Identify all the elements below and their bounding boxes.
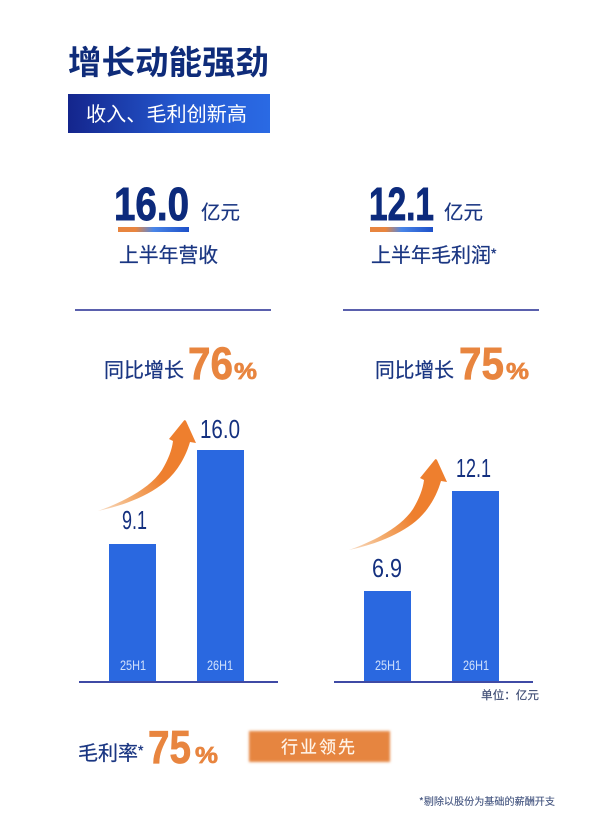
arrow: gross profit growth <box>349 459 447 550</box>
value 9.1: 9.1 <box>122 507 147 535</box>
gross margin asterisk: * <box>138 742 144 758</box>
bar 25H1 revenue: 25H1 <box>120 658 146 673</box>
value 16.0: 16.0 <box>200 416 240 444</box>
panel: revenue <box>75 178 271 389</box>
unit note: 单位：亿元 <box>481 687 540 703</box>
badge: industry leading: 行业领先 <box>281 733 355 758</box>
gross profit growth percent: % <box>506 358 529 384</box>
panel: gross profit <box>343 178 539 389</box>
gross margin percent: % <box>195 742 218 768</box>
bar chart: gross profit <box>334 455 533 683</box>
gross profit figure: 12.1 <box>369 178 434 230</box>
gross profit unit: 亿元 <box>444 196 483 225</box>
revenue growth label: 同比增长 <box>104 354 184 383</box>
value 12.1: 12.1 <box>456 455 491 483</box>
revenue unit: 亿元 <box>201 196 240 225</box>
badge: industry leading <box>249 731 390 762</box>
subtitle banner <box>68 94 270 133</box>
bar 25H1 revenue <box>109 544 156 682</box>
bar 26H1 revenue: 26H1 <box>207 658 233 673</box>
title: 增长动能强劲 <box>68 36 269 84</box>
subtitle banner: 收入、毛利创新高 <box>86 98 247 127</box>
gross profit growth value: 75 <box>459 338 504 389</box>
gross profit growth label: 同比增长 <box>375 354 454 383</box>
revenue growth percent: % <box>234 358 257 384</box>
bar 26H1 gross profit: 26H1 <box>463 658 489 673</box>
bar 26H1 revenue <box>197 450 244 682</box>
bar 26H1 gross profit <box>452 491 499 682</box>
gross margin metric <box>78 721 218 773</box>
revenue figure: 16.0 <box>114 178 189 230</box>
arrow: revenue growth <box>98 420 196 511</box>
gross profit underline <box>370 227 433 232</box>
gross margin label: 毛利率 <box>78 737 138 766</box>
bar chart: revenue <box>79 416 278 683</box>
bar 25H1 gross profit <box>364 591 411 682</box>
revenue label: 上半年营收 <box>119 239 218 268</box>
gross profit asterisk: * <box>491 245 497 261</box>
footnote: *剔除以股份为基础的薪酬开支 <box>419 793 555 808</box>
revenue underline <box>118 227 189 232</box>
bar 25H1 gross profit: 25H1 <box>375 658 401 673</box>
revenue growth value: 76 <box>188 338 233 389</box>
value 6.9: 6.9 <box>372 555 402 583</box>
gross margin value: 75 <box>148 721 191 773</box>
gross profit label: 上半年毛利润 <box>371 239 491 268</box>
